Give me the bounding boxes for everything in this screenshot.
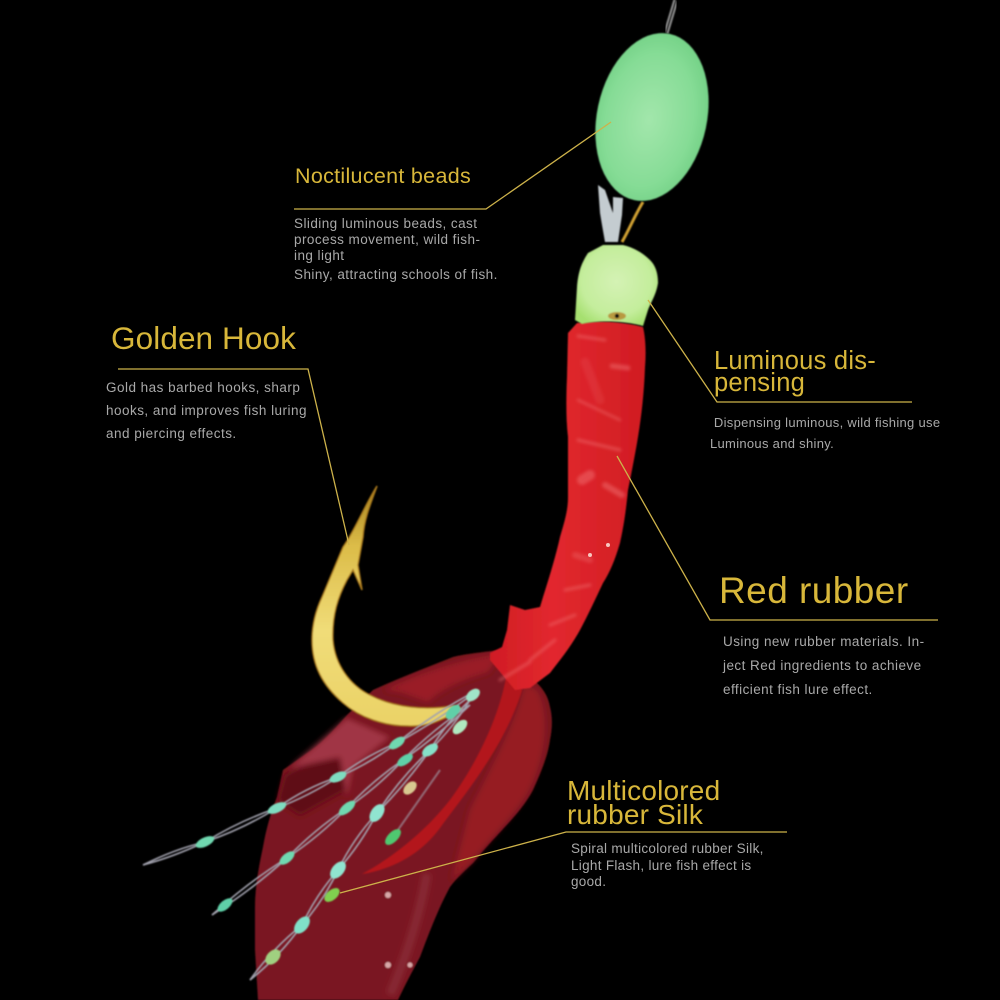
- heading: Luminous dispensing: pensing: [714, 369, 805, 397]
- text: Multicolored rubber Silk description: good.: [571, 874, 606, 889]
- text: Luminous dispensing description: Dispensing luminous, wild fishing use: [714, 415, 940, 430]
- text: Noctilucent beads description: Shiny, attracting schools of fish.: [294, 267, 498, 282]
- fishing line: [666, 0, 676, 33]
- text: Red rubber description: ject Red ingredients to achieve: [723, 658, 922, 673]
- text: Multicolored rubber Silk description: Light Flash, lure fish effect is: [571, 858, 751, 872]
- text: Golden Hook description: Gold has barbed hooks, sharp: [106, 380, 300, 395]
- heading: Multicolored rubber Silk: [567, 775, 720, 830]
- text: Golden Hook description: [106, 380, 307, 441]
- upper luminous bead: [581, 22, 723, 212]
- leader lines: [118, 122, 938, 893]
- lower luminous bead: [575, 245, 658, 326]
- heading: Multicolored rubber Silk: rubber Silk: [567, 799, 703, 830]
- text: Red rubber description: efficient fish lure effect.: [723, 682, 873, 697]
- heading: Noctilucent beads: Noctilucent beads: [295, 164, 471, 188]
- text: Red rubber description: Using new rubber materials. In-: [723, 634, 925, 649]
- hook: [312, 486, 462, 726]
- text: Noctilucent beads description: process movement, wild fish-: [294, 232, 480, 247]
- heading: Luminous dispensing: [714, 347, 876, 397]
- text: Luminous dispensing description: Luminous and shiny.: [710, 436, 834, 451]
- heading: Golden Hook: Golden Hook: [111, 320, 296, 356]
- heading: Red rubber: Red rubber: [719, 570, 909, 611]
- silk strands: [143, 686, 482, 980]
- text: Golden Hook description: and piercing effects.: [106, 426, 237, 441]
- text: Golden Hook description: hooks, and improves fish luring: [106, 403, 307, 418]
- text: Noctilucent beads description: [294, 216, 498, 282]
- text: Multicolored rubber Silk description: Spiral multicolored rubber Silk,: [571, 841, 764, 856]
- text: Noctilucent beads description: ing light: [294, 248, 344, 263]
- swivel: [598, 185, 643, 242]
- red rubber body: [490, 322, 646, 690]
- text: Multicolored rubber Silk description: [571, 841, 764, 889]
- text: Red rubber description: [722, 634, 925, 697]
- skirt: red translucent: [255, 650, 552, 1000]
- text: Luminous dispensing description: [710, 415, 940, 451]
- text: Noctilucent beads description: Sliding luminous beads, cast: [294, 216, 477, 231]
- heading: Luminous dispensing: Luminous dis-: [714, 347, 876, 375]
- heading: Multicolored rubber Silk: Multicolored: [567, 775, 720, 806]
